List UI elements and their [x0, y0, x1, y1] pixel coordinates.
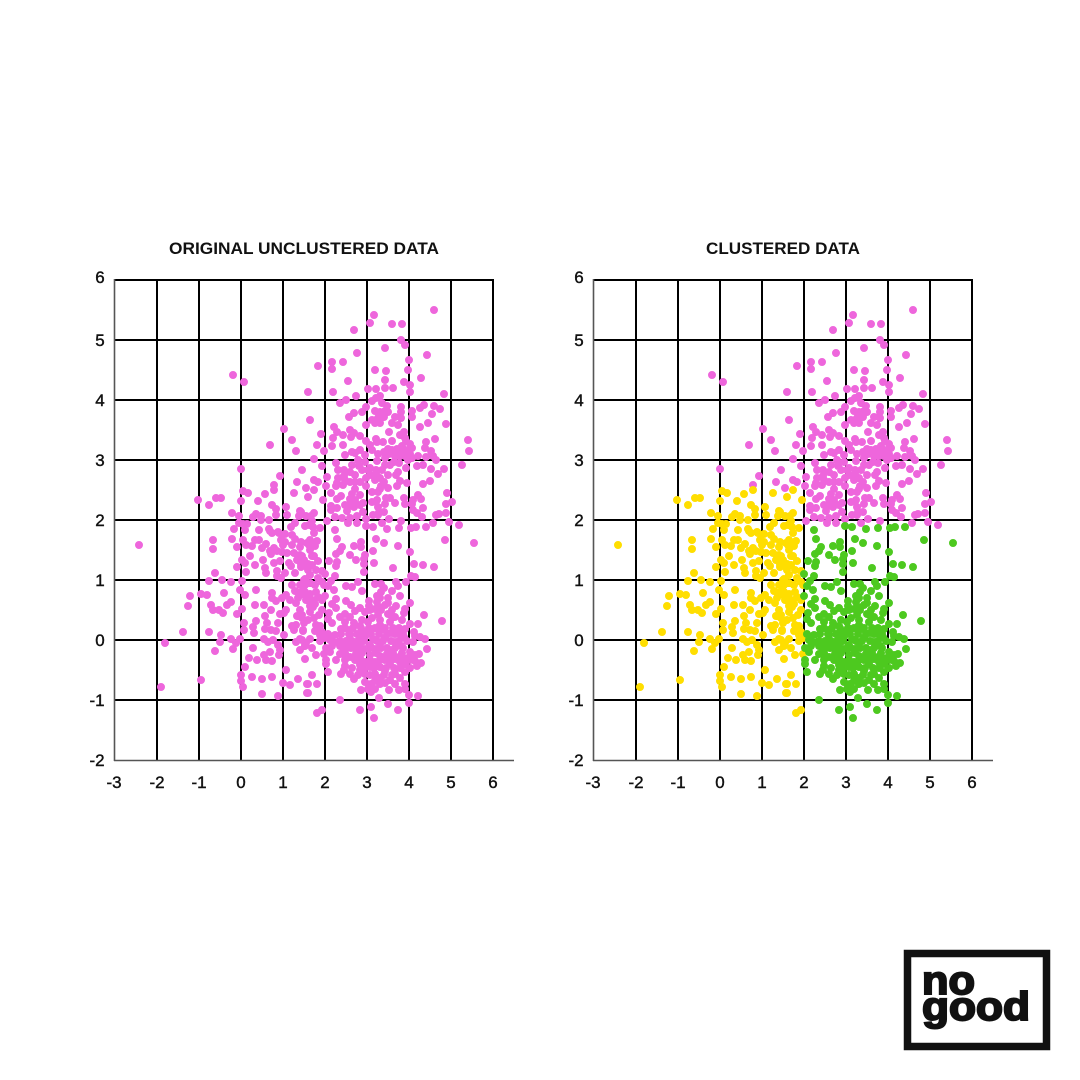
x axis labels: left chart: 0	[236, 773, 246, 792]
y axis labels: right chart: 2	[574, 511, 584, 530]
y axis labels: left chart: 4	[95, 391, 105, 410]
chart: clustered scatter plot	[568, 268, 993, 792]
y axis labels: right chart: -2	[568, 751, 584, 770]
cluster: green points	[804, 526, 953, 718]
y axis labels: right chart	[568, 268, 584, 770]
x axis labels: left chart: 3	[362, 773, 372, 792]
y axis labels: left chart: 3	[95, 451, 105, 470]
title: original unclustered data: ORIGINAL UNCLUSTERED DATA	[169, 239, 439, 258]
y axis labels: right chart: 6	[574, 268, 584, 287]
x axis labels: right chart: 6	[967, 773, 977, 792]
x axis labels: right chart: 5	[925, 773, 935, 792]
y axis labels: right chart: 3	[574, 451, 584, 470]
y axis labels: right chart: -1	[568, 691, 584, 710]
axes: right chart	[593, 279, 993, 761]
y axis labels: left chart: 5	[95, 331, 105, 350]
x axis labels: left chart: 5	[446, 773, 456, 792]
y axis labels: left chart: 2	[95, 511, 105, 530]
x axis labels: left chart: -2	[149, 773, 165, 792]
logo frame	[908, 954, 1046, 1046]
cluster: pink points	[712, 310, 948, 525]
y axis labels: right chart: 4	[574, 391, 584, 410]
y axis labels: left chart: -1	[89, 691, 105, 710]
logo: nogood	[908, 954, 1046, 1046]
x axis labels: left chart: 1	[278, 773, 288, 792]
x axis labels: right chart: 4	[883, 773, 893, 792]
x axis labels: right chart	[585, 773, 977, 792]
y axis labels: left chart: -2	[89, 751, 105, 770]
x axis labels: right chart: 3	[841, 773, 851, 792]
logo word: no: no	[922, 959, 975, 1003]
x axis labels: right chart: -1	[670, 773, 686, 792]
y axis labels: left chart: 6	[95, 268, 105, 287]
x axis labels: left chart: 6	[488, 773, 498, 792]
x axis labels: left chart: -3	[106, 773, 122, 792]
y axis labels: right chart: 5	[574, 331, 584, 350]
axes: left chart	[114, 279, 514, 761]
logo word: good: good	[922, 985, 1030, 1029]
x axis labels: left chart: 2	[320, 773, 330, 792]
y axis labels: right chart: 0	[574, 631, 584, 650]
chart: original unclustered scatter plot	[89, 268, 514, 792]
cluster: yellow points	[618, 490, 803, 713]
y axis labels: left chart: 1	[95, 571, 105, 590]
grid: right chart	[593, 279, 973, 760]
y axis labels: right chart: 1	[574, 571, 584, 590]
y axis labels: left chart	[89, 268, 105, 770]
grid: left chart	[114, 279, 494, 760]
x axis labels: right chart: -2	[628, 773, 644, 792]
y axis labels: left chart: 0	[95, 631, 105, 650]
x axis labels: right chart: -3	[585, 773, 601, 792]
x axis labels: right chart: 0	[715, 773, 725, 792]
x axis labels: left chart	[106, 773, 498, 792]
x axis labels: right chart: 2	[799, 773, 809, 792]
title: clustered data: CLUSTERED DATA	[706, 239, 860, 258]
x axis labels: left chart: 4	[404, 773, 414, 792]
x axis labels: right chart: 1	[757, 773, 767, 792]
data points: all pink	[139, 310, 474, 718]
x axis labels: left chart: -1	[191, 773, 207, 792]
